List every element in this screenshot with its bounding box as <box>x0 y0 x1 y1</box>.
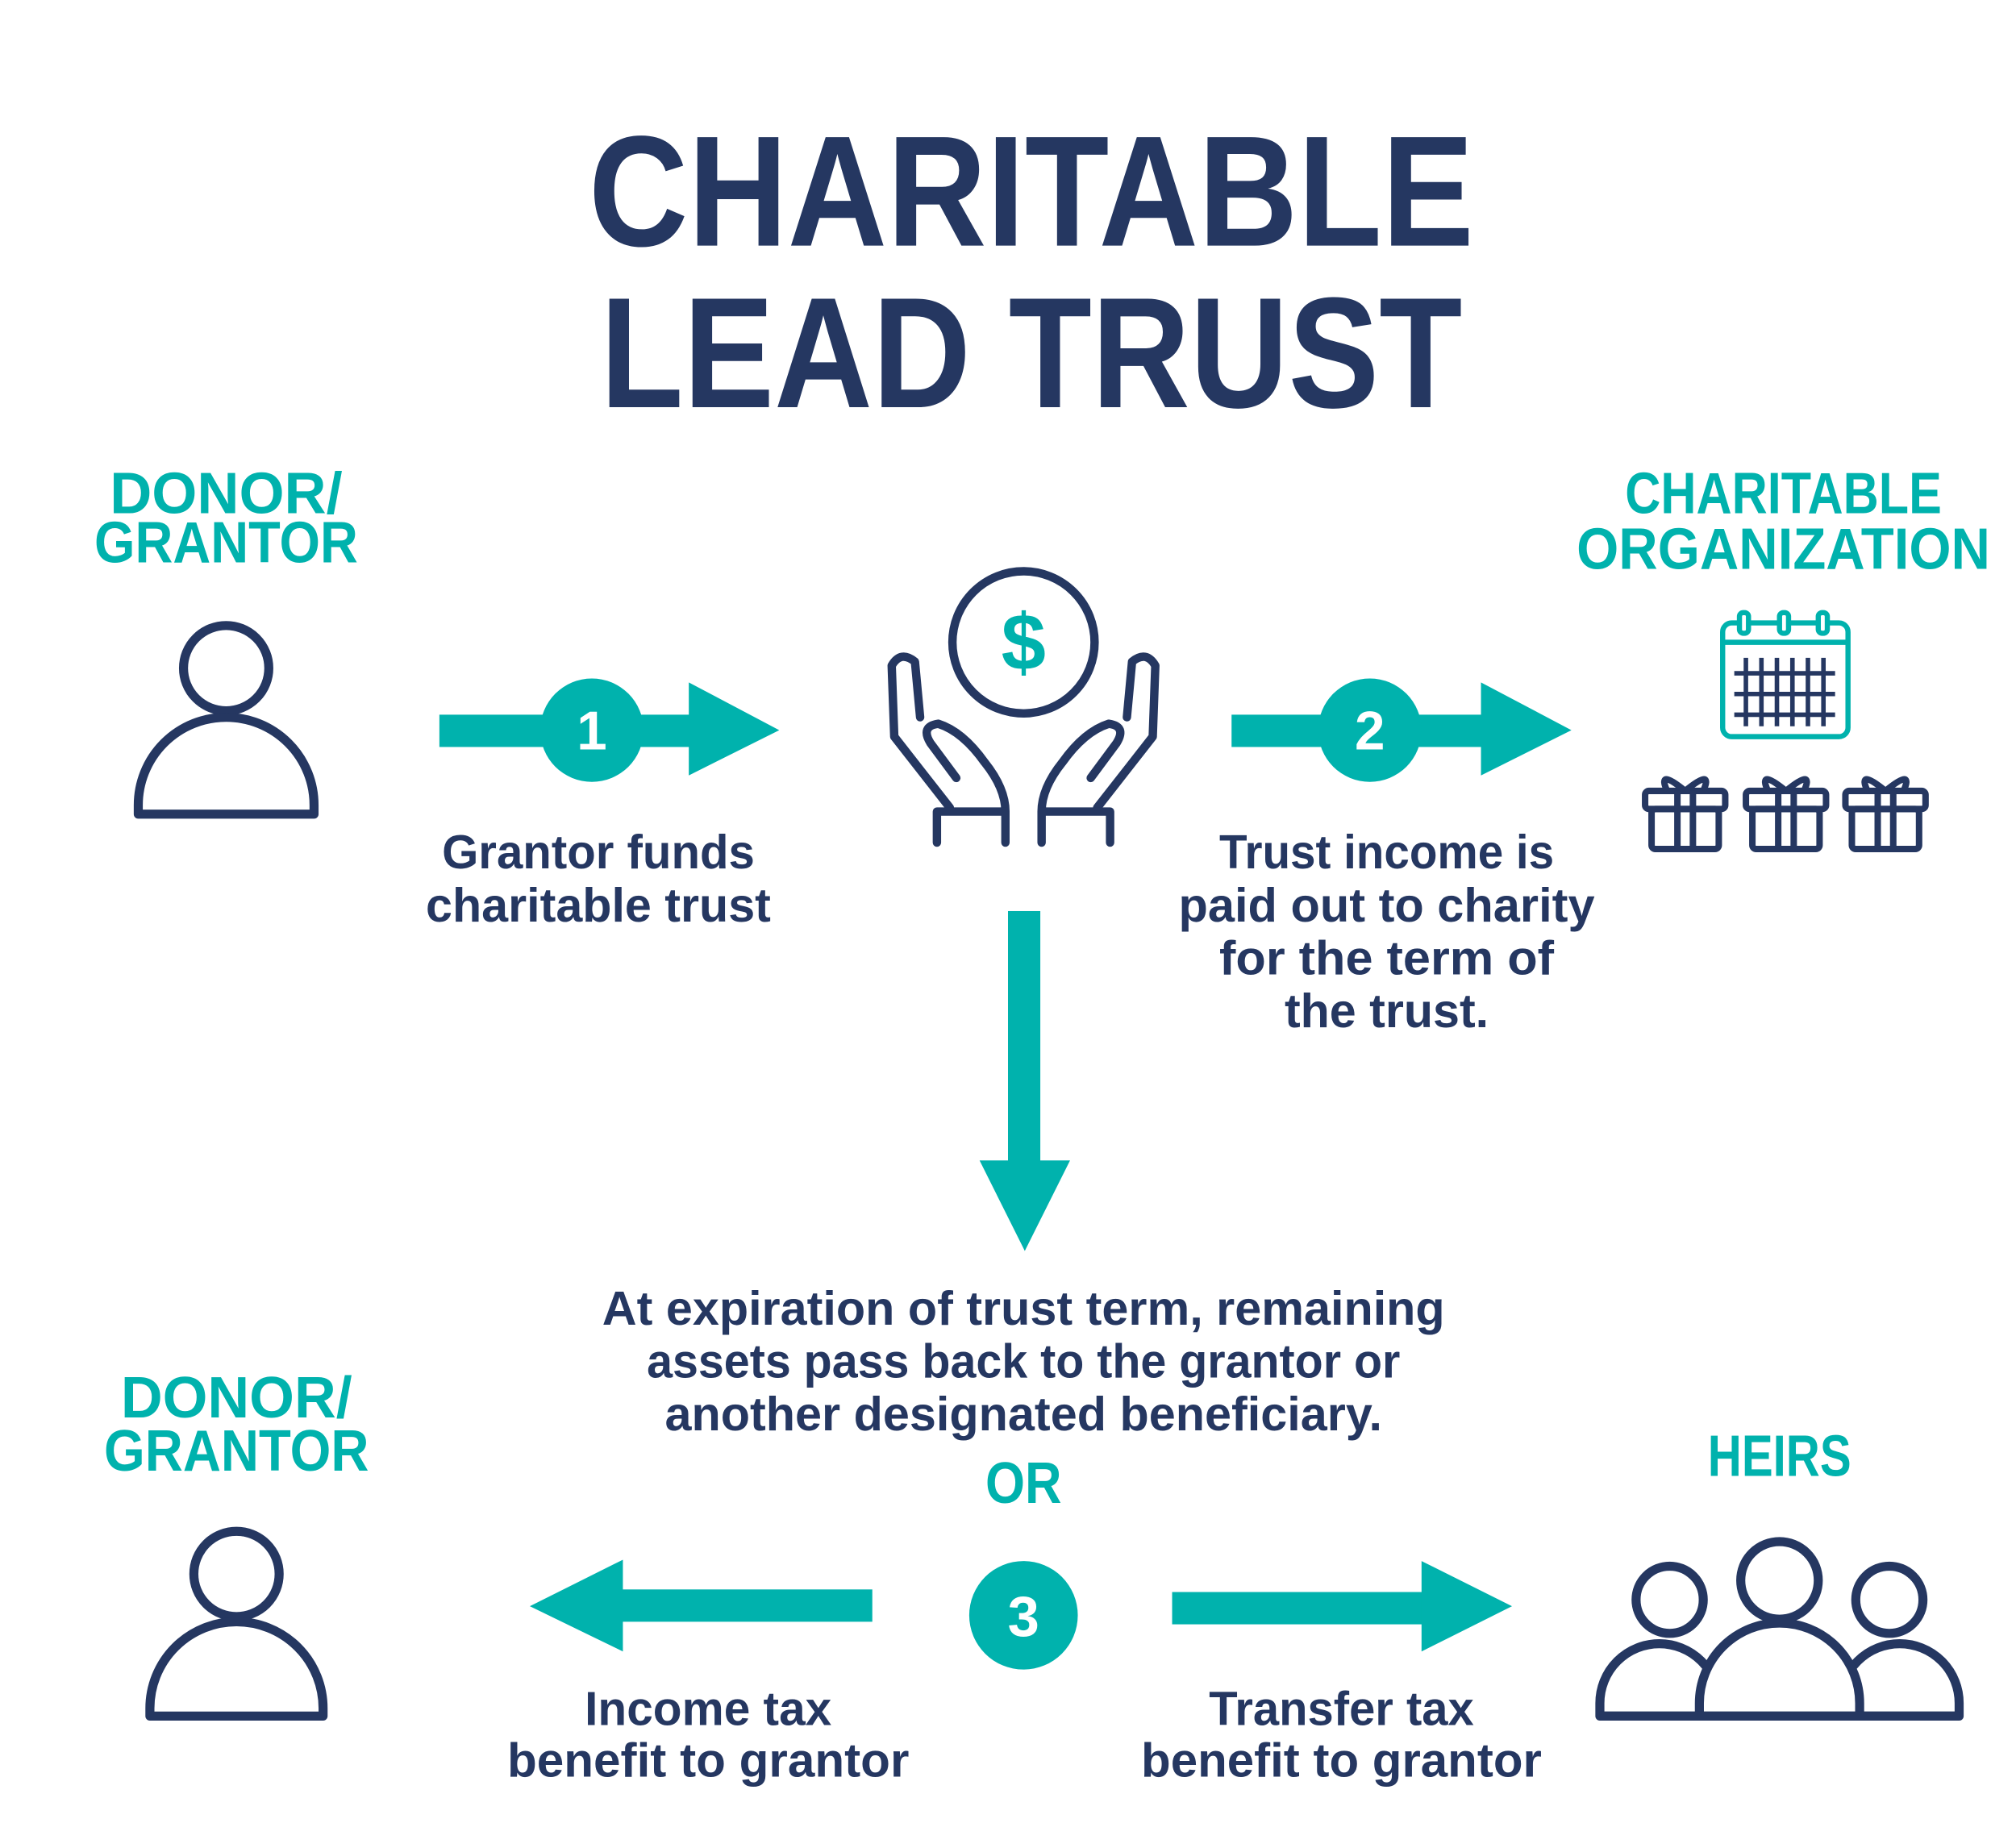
label: charitable organization: ORGANIZATION <box>1577 517 1990 581</box>
text: income tax: Income tax <box>585 1682 831 1736</box>
text: grantor funds: Grantor funds <box>442 825 755 879</box>
label: donor/grantor top <box>94 461 358 575</box>
arrow 1 <box>439 679 779 782</box>
text: grantor funds <box>426 825 771 932</box>
text: grantor funds: charitable trust <box>426 878 771 932</box>
icon: donor person top <box>138 626 314 814</box>
label: charitable organization <box>1577 461 1990 581</box>
arrow 2: 2 <box>1355 701 1385 762</box>
text: expiration: assets pass back to the grantor or <box>647 1334 1400 1388</box>
icon: hands holding dollar <box>892 571 1156 843</box>
label: or: OR <box>985 1451 1062 1516</box>
text: transfer tax <box>1141 1682 1542 1788</box>
icon: hands holding dollar: $ <box>1002 597 1046 687</box>
text: trust income <box>1179 825 1595 1038</box>
arrow: right <box>1173 1561 1512 1651</box>
label: heirs: HEIRS <box>1708 1424 1851 1488</box>
text: expiration <box>602 1281 1445 1441</box>
text: expiration: At expiration of trust term, remaining <box>602 1281 1445 1335</box>
badge 3: 3 <box>1008 1584 1039 1648</box>
arrow: down <box>980 911 1070 1251</box>
text: trust income: the trust. <box>1285 984 1489 1038</box>
icon: heirs <box>1600 1542 1959 1716</box>
icon: calendar <box>1722 613 1848 737</box>
text: income tax: benefit to grantor <box>507 1734 909 1788</box>
text: expiration: another designated beneficiary. <box>665 1387 1382 1441</box>
title: LEAD TRUST <box>600 265 1462 441</box>
arrow 1: 1 <box>577 701 607 762</box>
title: CHARITABLE <box>589 104 1474 280</box>
arrow: left <box>530 1559 873 1651</box>
icon: donor person bottom <box>150 1531 323 1716</box>
text: transfer tax: Transfer tax <box>1209 1682 1474 1736</box>
text: trust income: Trust income is <box>1219 825 1554 879</box>
icon: gifts <box>1645 780 1926 849</box>
text: income tax <box>507 1682 909 1788</box>
arrow 2 <box>1231 679 1572 782</box>
text: trust income: for the term of <box>1219 931 1554 985</box>
label: donor/grantor bottom: DONOR/ <box>121 1366 352 1430</box>
label: donor/grantor bottom: GRANTOR <box>104 1419 369 1484</box>
text: transfer tax: benefit to grantor <box>1141 1734 1542 1788</box>
label: charitable organization: CHARITABLE <box>1625 461 1942 526</box>
label: donor/grantor bottom <box>104 1366 369 1484</box>
text: trust income: paid out to charity <box>1179 878 1595 932</box>
label: donor/grantor top: DONOR/ <box>110 461 343 526</box>
badge 3 <box>969 1561 1078 1670</box>
label: donor/grantor top: GRANTOR <box>94 510 358 575</box>
title <box>589 104 1474 441</box>
